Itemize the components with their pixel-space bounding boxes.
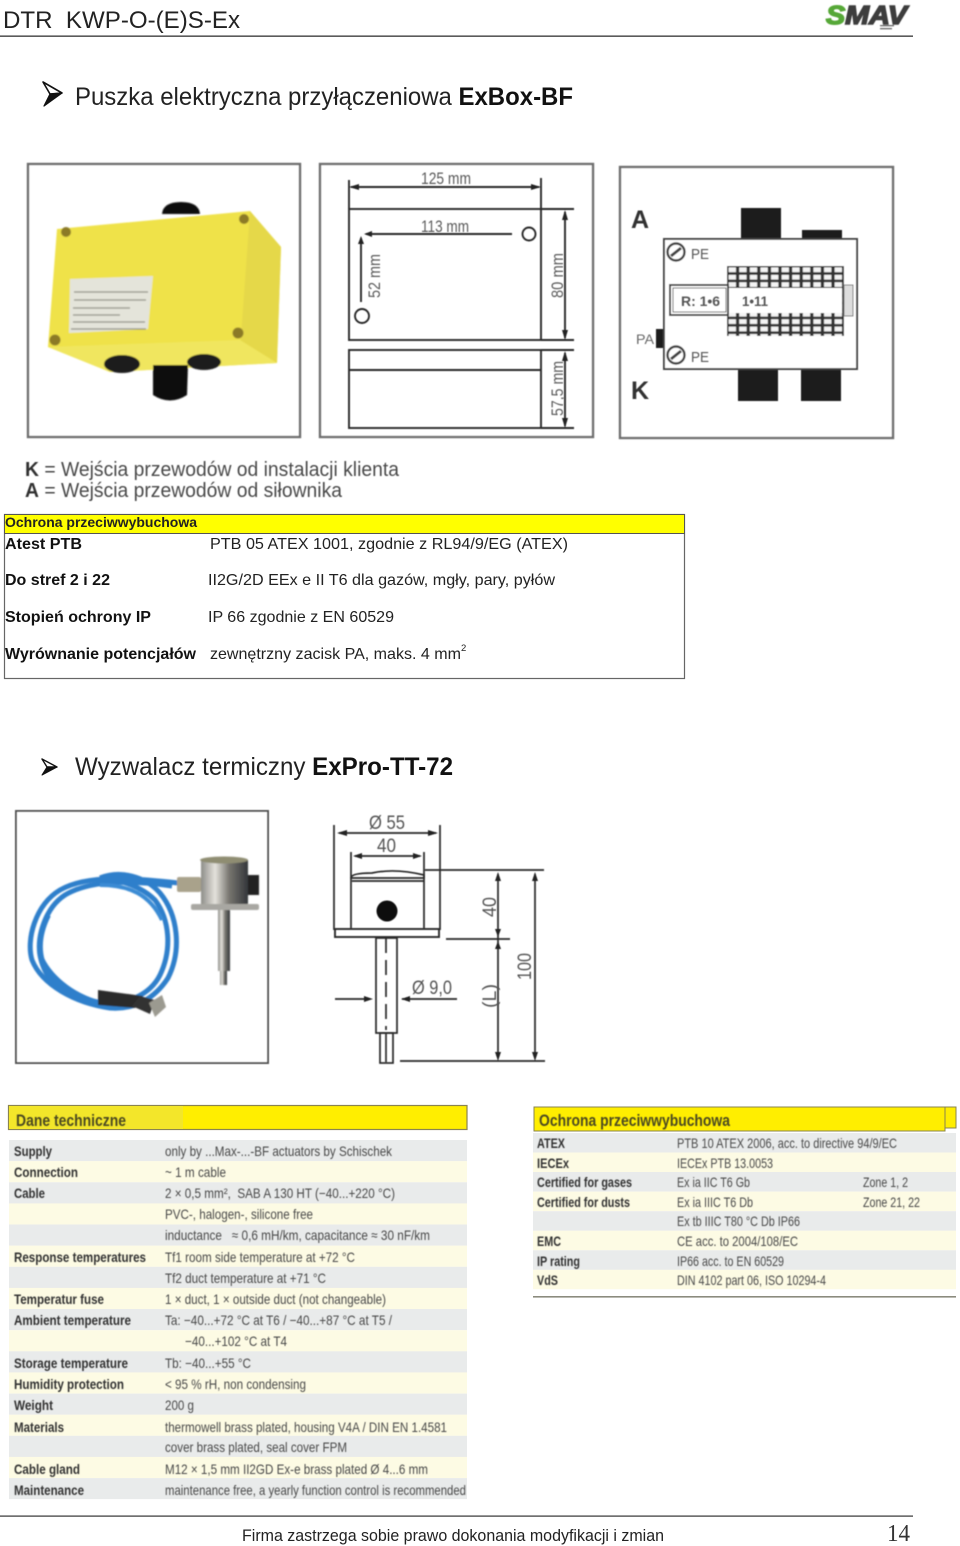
probe outline	[376, 938, 397, 1033]
table: Ochrona przeciwwybuchowa ExBox-BF: Ochrona przeciwwybuchowa	[5, 514, 197, 530]
table row values: Tf1 room side temperature at +72 °C	[165, 1249, 355, 1265]
table: Ochrona przeciwwybuchowa ExBox-BF: Atest PTB	[5, 536, 82, 553]
drawing labels: 40	[377, 836, 396, 857]
sensor housing	[201, 860, 248, 905]
table labels and values: Certified for dusts	[537, 1194, 630, 1210]
table labels and values: Zone 21, 22	[863, 1194, 920, 1210]
wiring labels: PA	[636, 331, 655, 347]
table row values: thermowell brass plated, housing V4A / DIN EN 1.4581	[165, 1419, 447, 1435]
table: Ochrona przeciwwybuchowa ExBox-BF: II2G/2D EEx e II T6 dla gazów, mgły, pary, pyłów	[208, 572, 555, 589]
dimension labels: 57,5 mm	[548, 361, 567, 416]
top cable gland	[162, 202, 200, 214]
housing outline	[334, 825, 440, 930]
table row values: inductance ≈ 0,6 mH/km, capacitance ≈ 30 nF/km	[165, 1227, 430, 1243]
table row labels: Maintenance	[14, 1482, 84, 1498]
page header	[0, 0, 913, 37]
table row labels: Ambient temperature	[14, 1312, 131, 1328]
legend: K and A entries: A = Wejścia przewodów od siłownika	[25, 480, 343, 502]
table row labels: Materials	[14, 1419, 64, 1435]
table labels and values: IP rating	[537, 1253, 580, 1269]
panel: wiring layout	[620, 167, 893, 438]
cable gland	[177, 877, 201, 892]
panel: photo of thermal trigger	[16, 811, 268, 1063]
corner screws	[61, 227, 71, 237]
table labels and values: Zone 1, 2	[863, 1174, 908, 1190]
table header	[8, 1106, 467, 1130]
wiring labels: PE	[691, 246, 709, 263]
table: Ochrona przeciwwybuchowa ExBox-BF: Wyrównanie potencjałów	[5, 646, 197, 663]
table row values: 1 × duct, 1 × outside duct (not changeable)	[165, 1291, 386, 1307]
drawing labels: 40	[480, 897, 501, 917]
wiring labels: 1•11	[742, 293, 768, 309]
drawing labels	[369, 813, 536, 1008]
terminal block	[727, 266, 844, 336]
flange	[191, 904, 259, 910]
R terminal box	[670, 285, 728, 315]
table: Ochrona przeciwwybuchowa ExBox-BF: 2	[461, 643, 466, 654]
table labels and values: EMC	[537, 1233, 561, 1249]
table row values: PVC-, halogen-, silicone free	[165, 1206, 313, 1222]
heading text: Puszka elektryczna przyłączeniowa ExBox-BF	[75, 83, 573, 111]
table labels and values: Ex ia IIIC T6 Db	[677, 1194, 753, 1210]
table labels and values: IECEx	[537, 1155, 569, 1171]
table header	[534, 1107, 956, 1131]
drawing labels: Ø 9,0	[412, 978, 452, 999]
drawing labels: (L)	[480, 984, 501, 1008]
table labels and values: Ex ia IIC T6 Gb	[677, 1174, 750, 1190]
table bottom rule	[533, 1296, 956, 1298]
table row values: cover brass plated, seal cover FPM	[165, 1439, 347, 1455]
black cable entries	[741, 208, 781, 239]
table: Dane techniczne	[8, 1106, 467, 1499]
wiring labels: R: 1•6	[681, 293, 720, 309]
PA terminal	[656, 329, 663, 348]
drawing labels: 100	[515, 953, 536, 980]
icon: arrow bullet	[43, 82, 62, 106]
mounting holes	[522, 228, 536, 240]
dimension labels: 125 mm	[421, 169, 471, 188]
table row values: Tf2 duct temperature at +71 °C	[165, 1270, 326, 1286]
panel: photo of yellow junction box	[28, 164, 300, 437]
heading text: Wyzwalacz termiczny ExPro-TT-72	[75, 753, 453, 781]
dimension labels: 113 mm	[421, 217, 469, 236]
table: Ochrona przeciwwybuchowa ExBox-BF: Do stref 2 i 22	[5, 572, 110, 589]
table row stripes	[9, 1140, 467, 1499]
table labels and values: IP66 acc. to EN 60529	[677, 1253, 784, 1269]
blue cable coil	[30, 874, 178, 1008]
table: Ochrona przeciwwybuchowa ExBox-BF: zewnętrzny zacisk PA, maks. 4 mm	[210, 646, 461, 663]
side hole	[376, 900, 398, 922]
dimension labels: 80 mm	[548, 253, 567, 298]
dimension labels: 52 mm	[365, 254, 384, 298]
table row values: ~ 1 m cable	[165, 1164, 226, 1180]
chart: dimensional drawing of trigger	[334, 813, 545, 1063]
box body	[48, 211, 281, 372]
table row values	[165, 1143, 466, 1498]
table row values: 200 g	[165, 1397, 194, 1413]
table labels and values: ATEX	[537, 1135, 566, 1151]
table row labels: Storage temperature	[14, 1355, 128, 1371]
table labels and values: DIN 4102 part 06, ISO 10294-4	[677, 1272, 826, 1288]
dimension labels	[365, 169, 567, 416]
table header: Ochrona przeciwwybuchowa	[539, 1111, 730, 1130]
dimension lines	[351, 187, 565, 426]
table row values: Tb: −40...+55 °C	[165, 1355, 251, 1371]
table row labels: Response temperatures	[14, 1249, 146, 1265]
product label	[69, 276, 153, 333]
lower cable glands	[104, 355, 140, 373]
table row values: only by ...Max-...-BF actuators by Schischek	[165, 1143, 393, 1159]
table: Ochrona przeciwwybuchowa ExBox-BF: PTB 05 ATEX 1001, zgodnie z RL94/9/EG (ATEX)	[210, 536, 568, 553]
table row labels: Temperatur fuse	[14, 1291, 104, 1307]
housing side view	[349, 350, 541, 428]
table row labels: Connection	[14, 1164, 78, 1180]
panel: dimensional drawing of box	[320, 164, 593, 437]
drawing labels: Ø 55	[369, 813, 405, 834]
table labels and values: Certified for gases	[537, 1174, 632, 1190]
table row labels: Supply	[14, 1143, 52, 1159]
legend: K and A entries	[25, 459, 400, 502]
page footer	[0, 1516, 913, 1546]
table row labels	[14, 1143, 146, 1498]
table row values: maintenance free, a yearly function control is recommended	[165, 1482, 466, 1498]
wiring labels: A	[631, 206, 649, 234]
legend: K and A entries: K = Wejścia przewodów od instalacji klienta	[25, 459, 400, 481]
document title: DTR KWP-O-(E)S-Ex	[3, 7, 240, 34]
plug connector	[98, 990, 143, 1008]
side connector	[246, 875, 259, 895]
table row labels: Cable gland	[14, 1461, 80, 1477]
table row values: < 95 % rH, non condensing	[165, 1376, 306, 1392]
PE screws	[668, 244, 684, 260]
table row values: 2 × 0,5 mm², SAB A 130 HT (−40...+220 °C)	[165, 1185, 395, 1201]
icon: SMAV logo: SMAV	[826, 0, 910, 30]
table row values: M12 × 1,5 mm II2GD Ex-e brass plated Ø 4...6 mm	[165, 1461, 428, 1477]
table labels and values	[537, 1135, 920, 1288]
enclosure outline	[664, 239, 857, 369]
wiring labels	[631, 206, 768, 405]
wiring labels: PE	[691, 349, 709, 366]
section heading: ExBox-BF	[43, 82, 573, 111]
footer note: Firma zastrzega sobie prawo dokonania modyfikacji i zmian	[242, 1526, 664, 1545]
table row values: −40...+102 °C at T4	[185, 1333, 287, 1349]
table row values: Ta: −40...+72 °C at T6 / −40...+87 °C at T5 /	[165, 1312, 392, 1328]
dimension lines	[335, 833, 545, 1061]
probe stem	[218, 910, 230, 971]
table row labels: Humidity protection	[14, 1376, 124, 1392]
table: Ochrona przeciwwybuchowa ExPro-TT-72	[533, 1107, 956, 1298]
icon: arrow bullet	[42, 759, 57, 775]
housing top view	[349, 209, 541, 340]
arrowheads	[337, 830, 538, 1061]
table row labels: Cable	[14, 1185, 45, 1201]
table: Ochrona przeciwwybuchowa ExBox-BF: IP 66 zgodnie z EN 60529	[208, 609, 394, 626]
table: Ochrona przeciwwybuchowa ExBox-BF	[4, 514, 684, 678]
table row stripes	[533, 1133, 956, 1289]
table row labels: Weight	[14, 1397, 53, 1413]
table header: Dane techniczne	[16, 1111, 126, 1130]
wiring labels: K	[631, 377, 649, 405]
table labels and values: VdS	[537, 1272, 558, 1288]
table: Ochrona przeciwwybuchowa ExBox-BF: Stopień ochrony IP	[5, 609, 151, 626]
section heading: ExPro-TT-72	[42, 753, 453, 781]
table labels and values: CE acc. to 2004/108/EC	[677, 1233, 798, 1249]
table labels and values: PTB 10 ATEX 2006, acc. to directive 94/9/EC	[677, 1135, 897, 1151]
table labels and values: IECEx PTB 13.0053	[677, 1155, 773, 1171]
table labels and values: Ex tb IIIC T80 °C Db IP66	[677, 1213, 800, 1229]
